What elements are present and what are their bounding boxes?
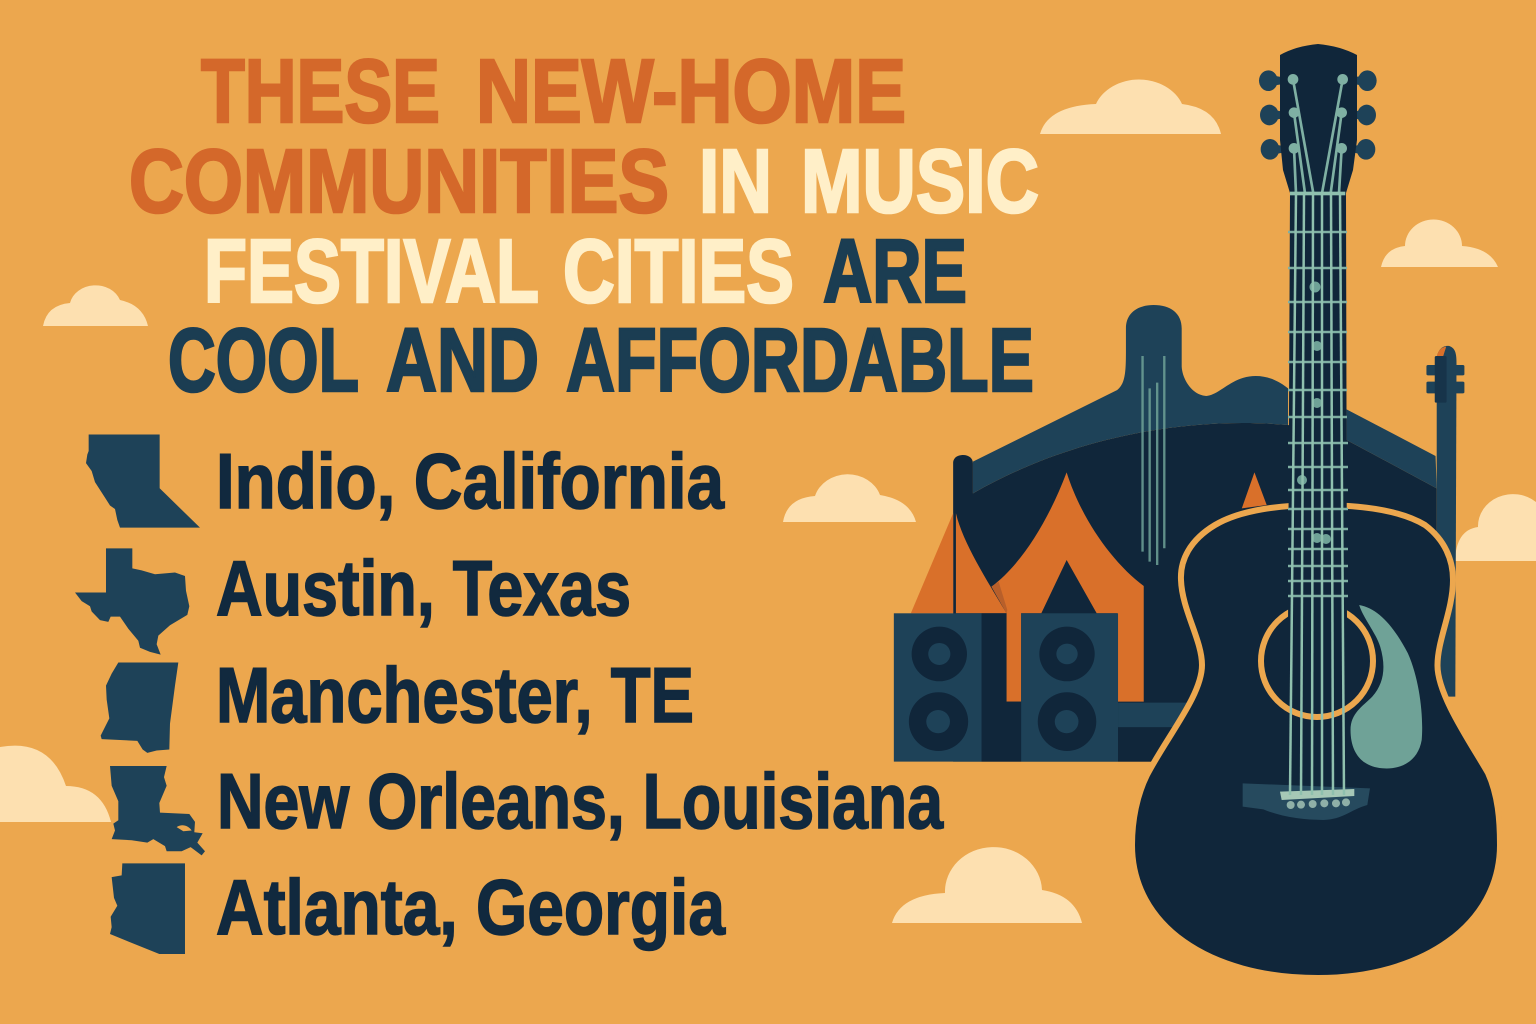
headstock pegs and strings <box>1288 74 1348 195</box>
tent shadow fold <box>992 582 1007 613</box>
title line 2 cream: IN <box>699 132 772 232</box>
stage right post with small headstock <box>1426 346 1464 697</box>
stage right band <box>1347 409 1437 488</box>
cloud: top centre-right <box>1040 79 1221 134</box>
tent: small far <box>1242 472 1267 508</box>
title line 1: THESE <box>201 42 440 142</box>
icon: Texas <box>75 548 189 655</box>
city list <box>216 437 944 951</box>
title <box>129 42 1039 411</box>
cloud: left edge <box>0 746 111 822</box>
tuners <box>1259 70 1377 160</box>
icon: Louisiana <box>110 766 205 855</box>
festival stage scene <box>894 305 1464 762</box>
guitar body <box>1132 505 1500 978</box>
title line 3 navy: ARE <box>823 222 967 322</box>
title line 3 cream: FESTIVAL <box>204 222 539 322</box>
title line 1: NEW-HOME <box>476 42 906 142</box>
guitar <box>1132 44 1500 978</box>
icon: Arizona <box>110 863 185 954</box>
title line 3 cream: CITIES <box>563 222 794 322</box>
speaker: right <box>1021 613 1173 762</box>
city: Indio: Indio, California <box>216 437 725 525</box>
title line 4: AND <box>386 311 539 411</box>
city: Austin: Austin, Texas <box>216 544 631 632</box>
title line 4: COOL <box>168 311 359 411</box>
strings on neck and body <box>1290 193 1344 795</box>
tent: centre <box>992 472 1144 702</box>
frets <box>1288 232 1348 596</box>
title line 2 cream: MUSIC <box>801 132 1039 232</box>
title line 2 cream <box>699 132 1039 232</box>
title line 1 <box>201 42 906 142</box>
cloud: centre <box>783 474 916 522</box>
speaker: left <box>894 613 1021 762</box>
cloud: left of title <box>43 285 148 326</box>
title line 4 <box>168 311 1034 411</box>
fret markers <box>1297 282 1331 544</box>
tent: left <box>911 513 1007 613</box>
stage roof band <box>973 305 1288 493</box>
state icons <box>75 434 205 954</box>
title line 2 orange: COMMUNITIES <box>129 132 669 232</box>
city: Atlanta: Atlanta, Georgia <box>216 863 726 951</box>
headstock and neck <box>1280 44 1357 630</box>
stage hanging strings <box>1143 356 1164 565</box>
cloud: right edge <box>1455 494 1536 561</box>
pickguard <box>1351 605 1422 769</box>
title line 4: AFFORDABLE <box>566 311 1034 411</box>
city: Manchester: Manchester, TE <box>216 651 694 739</box>
cloud: upper right <box>1381 220 1498 267</box>
cloud: bottom centre <box>892 847 1082 923</box>
speaker base <box>1118 703 1188 727</box>
city: New Orleans: New Orleans, Louisiana <box>217 757 944 845</box>
stage dark backdrop <box>953 423 1437 762</box>
icon: California <box>86 434 200 528</box>
icon: Tennessee <box>101 663 178 753</box>
sound hole <box>1261 605 1373 717</box>
bridge <box>1243 783 1370 820</box>
